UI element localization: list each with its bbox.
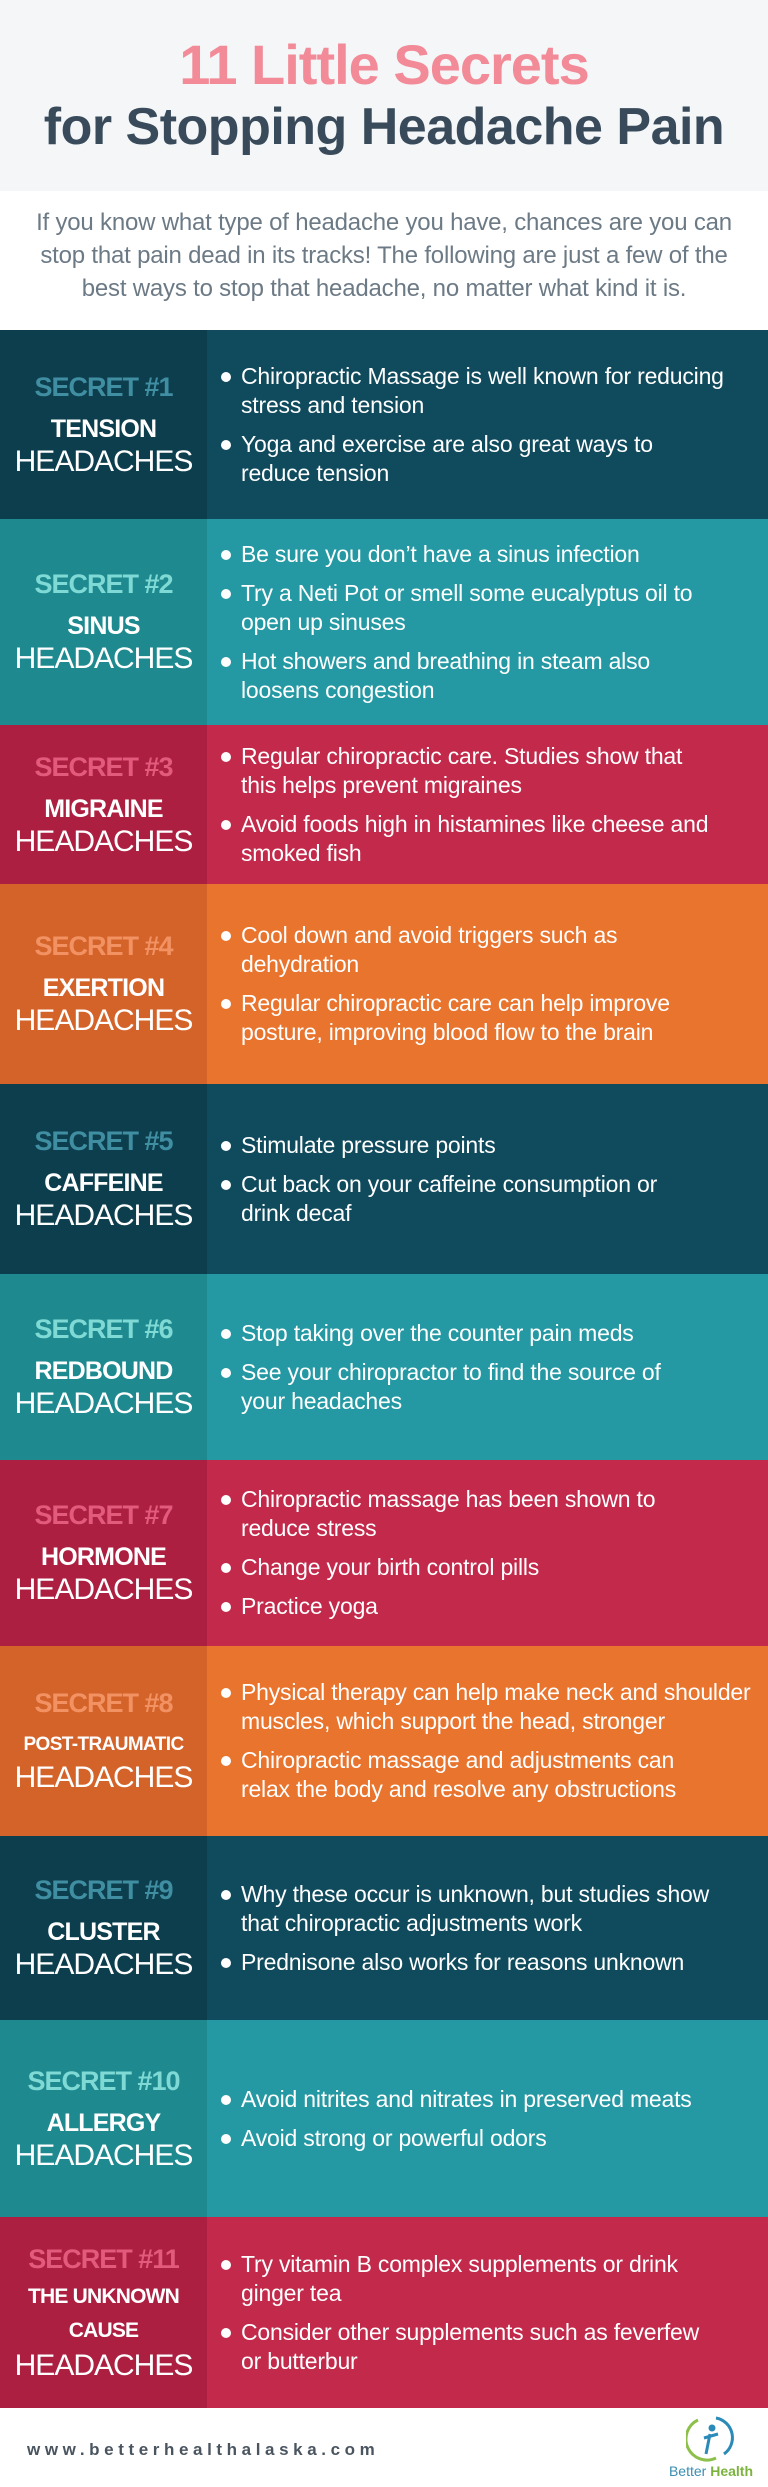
title line 1: 11 Little Secrets (179, 33, 589, 96)
panel: secret 9: that chiropractic adjustments work (241, 1910, 582, 1936)
panel: secret 2: loosens congestion (241, 676, 434, 702)
panel: secret 5: CAFFEINE (44, 1169, 163, 1197)
panel: secret 6: your headaches (241, 1388, 402, 1414)
intro text: stop that pain dead in its tracks! The following are just a few of the (40, 242, 728, 269)
panel: secret 1: HEADACHES (15, 444, 192, 478)
panel: secret 4: EXERTION (43, 974, 164, 1002)
panel: secret 3: Avoid foods high in histamines like cheese and (241, 810, 708, 836)
panel: secret 10: HEADACHES (15, 2138, 192, 2172)
panel: secret 4: posture, improving blood flow to the brain (241, 1019, 653, 1045)
panel: secret 6: Stop taking over the counter pain meds (241, 1320, 634, 1346)
intro text (36, 209, 732, 302)
panel: secret 6: See your chiropractor to find the source of (241, 1358, 661, 1384)
panel: secret 9: CLUSTER (47, 1918, 160, 1946)
panel: secret 9: HEADACHES (15, 1948, 192, 1981)
panel: secret 2: Try a Neti Pot or smell some eucalyptus oil to (241, 580, 692, 606)
title line 2: for Stopping Headache Pain (44, 98, 724, 156)
panel: secret 6: SECRET #6 (34, 1314, 173, 1344)
panel: secret 4: Cool down and avoid triggers such as (241, 922, 617, 948)
panel: secret 1: Yoga and exercise are also great ways to (241, 430, 653, 456)
panel: secret 1: stress and tension (241, 392, 424, 418)
panel: secret 5 (0, 1084, 768, 1274)
panel: secret 3: SECRET #3 (34, 752, 173, 782)
panel: secret 2: Be sure you don’t have a sinus infection (241, 540, 640, 566)
panel: secret 4: HEADACHES (15, 1004, 192, 1037)
panel: secret 11: THE UNKNOWN (28, 2284, 179, 2308)
panel: secret 11: SECRET #11 (28, 2244, 179, 2274)
panel: secret 4 (0, 884, 768, 1084)
footer url: www.betterhealthalaska.com (27, 2440, 379, 2459)
panel: secret 2: Hot showers and breathing in steam also (241, 648, 650, 674)
panel: secret 8: HEADACHES (15, 1761, 192, 1794)
panel: secret 2: SECRET #2 (34, 569, 173, 599)
panel: secret 7 (0, 1460, 768, 1646)
panel: secret 5: Cut back on your caffeine consumption or (241, 1170, 657, 1196)
panel: secret 11: HEADACHES (15, 2348, 192, 2382)
panel: secret 4: SECRET #4 (34, 931, 173, 961)
panel: secret 3: HEADACHES (15, 824, 192, 858)
panel: secret 11: ginger tea (241, 2280, 341, 2306)
panel: secret 7: SECRET #7 (34, 1500, 173, 1530)
panel: secret 2: HEADACHES (15, 642, 192, 675)
panel: secret 7: reduce stress (241, 1515, 376, 1541)
panel: secret 8: muscles, which support the head, stronger (241, 1708, 665, 1734)
panel: secret 8 (0, 1646, 768, 1836)
panel: secret 7: Change your birth control pills (241, 1554, 539, 1580)
panel: secret 9: Why these occur is unknown, but studies show (241, 1880, 709, 1906)
panel: secret 6: HEADACHES (15, 1387, 192, 1420)
panel: secret 7: Practice yoga (241, 1593, 378, 1619)
panel: secret 4: Regular chiropractic care can help improve (241, 990, 670, 1016)
logo: Better Health: Better Health (669, 2463, 753, 2479)
panel: secret 8: relax the body and resolve any obstructions (241, 1776, 676, 1802)
panel: secret 8: POST-TRAUMATIC (23, 1734, 184, 1755)
panel: secret 10: SECRET #10 (27, 2066, 180, 2096)
panel: secret 7: HEADACHES (15, 1573, 192, 1606)
panel: secret 9: SECRET #9 (34, 1875, 173, 1905)
panel: secret 4: dehydration (241, 951, 359, 977)
panel: secret 3: this helps prevent migraines (241, 772, 522, 798)
panel: secret 10 (0, 2020, 768, 2217)
panel: secret 3: smoked fish (241, 840, 362, 866)
panel: secret 11: Consider other supplements such as feverfew (241, 2318, 699, 2344)
panel: secret 10: Avoid nitrites and nitrates in preserved meats (241, 2086, 692, 2112)
panel: secret 7: HORMONE (41, 1543, 166, 1571)
header (0, 0, 768, 191)
panel: secret 5: drink decaf (241, 1200, 351, 1226)
panel: secret 6: REDBOUND (34, 1357, 173, 1385)
logo: Better Health (669, 2416, 753, 2479)
panel: secret 2: SINUS (67, 612, 140, 640)
panel: secret 9 (0, 1836, 768, 2020)
panel: secret 10: Avoid strong or powerful odors (241, 2124, 547, 2150)
intro text: If you know what type of headache you have, chances are you can (36, 209, 732, 236)
panel: secret 5: SECRET #5 (34, 1126, 173, 1156)
panel: secret 3: Regular chiropractic care. Studies show that (241, 742, 682, 768)
panel: secret 8: Physical therapy can help make neck and shoulder (241, 1679, 750, 1705)
panel: secret 1: SECRET #1 (34, 372, 173, 402)
panel: secret 3 (0, 725, 768, 884)
intro text: best ways to stop that headache, no matter what kind it is. (82, 275, 686, 302)
panel: secret 9: Prednisone also works for reasons unknown (241, 1948, 684, 1974)
panel: secret 1: Chiropractic Massage is well known for reducing (241, 362, 724, 388)
panel: secret 10: ALLERGY (47, 2108, 160, 2136)
panel: secret 8: Chiropractic massage and adjustments can (241, 1747, 674, 1773)
panel: secret 11: CAUSE (69, 2318, 138, 2342)
panel: secret 1: TENSION (51, 414, 156, 442)
panel: secret 1: reduce tension (241, 460, 389, 486)
panel: secret 8: SECRET #8 (34, 1688, 173, 1718)
panel: secret 7: Chiropractic massage has been shown to (241, 1486, 655, 1512)
panel: secret 11: Try vitamin B complex supplements or drink (241, 2250, 678, 2276)
panel: secret 5: HEADACHES (15, 1199, 192, 1232)
panel: secret 2 (0, 519, 768, 725)
panel: secret 5: Stimulate pressure points (241, 1132, 496, 1158)
panel: secret 11 (0, 2217, 768, 2408)
panel: secret 3: MIGRAINE (44, 794, 163, 822)
panel: secret 1 (0, 330, 768, 519)
panel: secret 11: or butterbur (241, 2348, 358, 2374)
panel: secret 6 (0, 1274, 768, 1460)
panel: secret 2: open up sinuses (241, 608, 406, 634)
